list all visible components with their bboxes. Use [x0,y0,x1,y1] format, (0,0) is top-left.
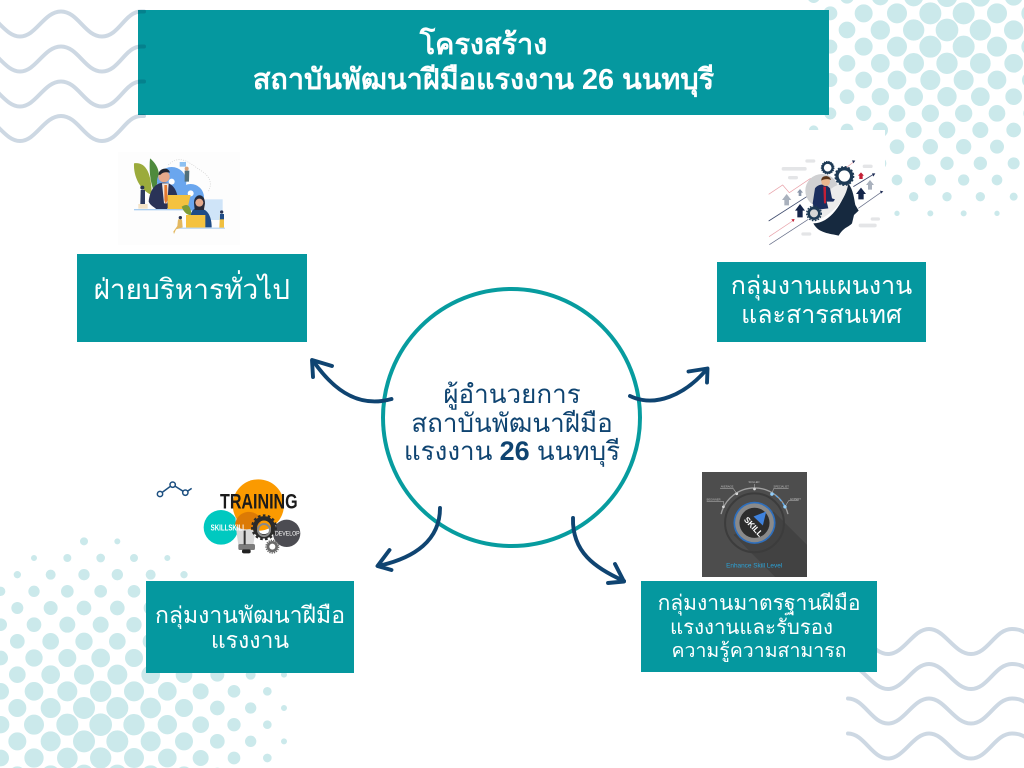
heading: title banner [138,10,829,115]
heading: title banner: สถาบันพัฒนาฝีมือแรงงาน 26 นนทบุรี [253,64,714,96]
arrow: to general administration [310,358,394,404]
panel: general administration [77,254,306,342]
panel: skill development: กลุ่มงานพัฒนาฝีมือ [155,602,345,628]
panel: planning and information: กลุ่มงานแผนงาน [731,272,912,300]
icon: skill level dial: EXPERT [790,497,801,501]
panel: skill standards and certification [641,581,877,672]
panel: skill standards and certification: ความรู้ความสามารถ [671,640,846,662]
panel: planning and information [717,262,926,342]
heading: title banner: โครงสร้าง [420,29,547,61]
icon: head with gears and growth arrows [768,160,884,245]
icon: training skill develop: DEVELOP [275,531,300,538]
icon: training skill develop [156,479,300,554]
arrow: to planning and information [628,366,710,402]
icon: skill level dial: AVERAGE [721,485,734,489]
icon: skill level dial: SKILLED [748,480,759,484]
icon: skill level dial: BEGINNER [707,497,721,501]
panel: skill development [146,581,354,673]
icon: skill level dial: SKILL [742,515,765,539]
arrow: to skill development [375,506,442,572]
center circle: director [381,287,642,548]
text: director title [404,379,620,467]
text: director title: ผู้อำนวยการ [443,379,581,409]
panel: general administration: ฝ่ายบริหารทั่วไป [93,274,290,305]
panel: skill standards and certification: แรงงานและรับรอง [670,617,833,639]
icon: training skill develop: SKILLSKILL [211,523,246,532]
icon: skill level dial: SPECIALIST [774,485,789,489]
icon: office team illustration [134,158,225,234]
arrow: to skill standards [571,516,626,585]
panel: skill standards and certification: กลุ่มงานมาตรฐานฝีมือ [658,592,860,615]
text: director title: สถาบันพัฒนาฝีมือ [411,408,613,438]
panel: skill development: แรงงาน [211,627,289,653]
panel: planning and information: และสารสนเทศ [741,301,902,329]
text: director title: แรงงาน 26 นนทบุรี [404,436,620,466]
icon: skill level dial [702,472,807,577]
icon: skill level dial: Enhance Skill Level [726,563,782,570]
